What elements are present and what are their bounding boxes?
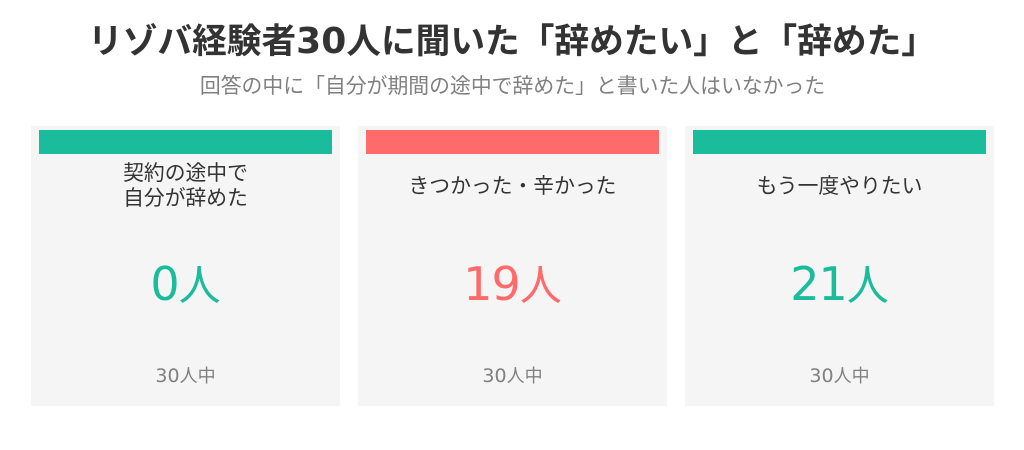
title: リゾバ経験者30人に聞いた「辞めたい」と「辞めた」 bbox=[88, 21, 936, 62]
green header bar bbox=[693, 130, 986, 154]
label: もう一度やりたい bbox=[757, 175, 922, 198]
panel: quit midway bbox=[31, 126, 340, 406]
caption: 30人中 bbox=[155, 365, 216, 387]
panel: hard times bbox=[358, 126, 667, 406]
red header bar bbox=[366, 130, 659, 154]
subtitle: 回答の中に「自分が期間の途中で辞めた」と書いた人はいなかった bbox=[200, 75, 825, 98]
number: 0人 bbox=[150, 257, 221, 311]
label: 契約の途中で bbox=[123, 162, 248, 185]
number: 19人 bbox=[463, 257, 562, 311]
panel: want to do again bbox=[685, 126, 994, 406]
label: 自分が辞めた bbox=[123, 186, 248, 210]
label: きつかった・辛かった bbox=[409, 175, 616, 198]
caption: 30人中 bbox=[809, 365, 870, 387]
green header bar bbox=[39, 130, 332, 154]
caption: 30人中 bbox=[482, 365, 543, 387]
label bbox=[123, 162, 248, 210]
number: 21人 bbox=[790, 257, 889, 311]
